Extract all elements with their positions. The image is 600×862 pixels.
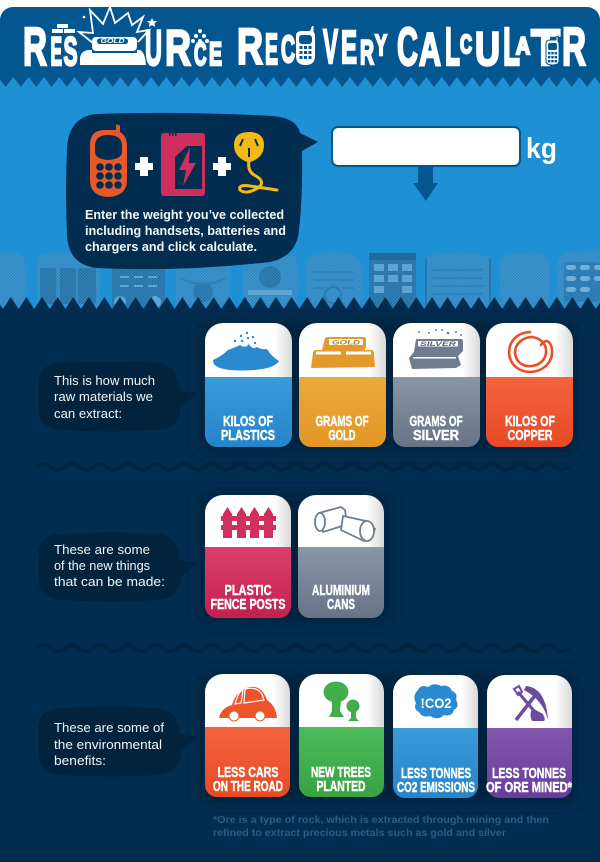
icon: co2 cloud: !CO2: [420, 695, 452, 711]
card: kilos of plastics: PLASTICS: [221, 428, 275, 444]
card: grams of silver: SILVER: [413, 428, 459, 444]
card: kilos of plastics: [205, 323, 292, 447]
icon: crushed can: [315, 507, 375, 541]
icon: mobile phone: [90, 125, 127, 197]
footnote: *Ore is a type of rock, which is extracted through mining and then: [213, 814, 549, 826]
callout: environmental benefits: benefits:: [54, 754, 106, 768]
icon: trees: [324, 682, 360, 721]
title: C: [460, 29, 472, 59]
icon: copper coil: [509, 332, 552, 372]
callout: environmental benefits: [38, 706, 197, 776]
title: E: [341, 21, 357, 73]
callout: raw materials: [38, 362, 197, 432]
icon: battery: [161, 133, 205, 196]
title: R: [165, 20, 191, 76]
callout: raw materials: raw materials we: [54, 390, 153, 404]
weight input box: [332, 127, 520, 166]
title: A: [516, 33, 530, 60]
page background: light blue: [0, 0, 600, 320]
icon: gold bar burst: [79, 7, 157, 65]
title: L: [503, 17, 520, 77]
header band: [0, 7, 600, 87]
icon: plus two: [213, 157, 231, 176]
card: less tonnes co2 emissions: [393, 675, 478, 798]
arrow: down: [413, 166, 438, 201]
instruction text: Enter the weight you’ve collected: [85, 208, 284, 222]
card: less tonnes co2 emissions: LESS TONNES: [401, 766, 471, 782]
title: V: [323, 21, 338, 74]
icon: silver bars: SILVER: [420, 342, 457, 348]
callout: new things: that can be made:: [54, 575, 165, 589]
card: grams of gold: [299, 323, 386, 447]
dark lower background with zigzag edge: [0, 297, 600, 862]
title: T: [531, 19, 560, 76]
background phones band: [0, 252, 600, 310]
title: E: [209, 36, 222, 72]
card shadow glows: [200, 322, 578, 802]
card: kilos of plastics: KILOS OF: [223, 414, 273, 430]
callout: raw materials: This is how much: [54, 374, 155, 388]
icon: stacked bars above E: [52, 24, 75, 33]
card: grams of gold: GOLD: [328, 428, 356, 444]
title: L: [445, 17, 460, 77]
card: aluminium cans: [298, 495, 384, 618]
icon: dots above C: [191, 29, 209, 43]
instruction text: chargers and click calculate.: [85, 240, 257, 254]
panel: instruction speech bubble: [66, 113, 318, 269]
card: grams of silver: [393, 323, 480, 447]
card: less cars on the road: [205, 674, 290, 797]
divider wave one: [37, 464, 569, 470]
card: kilos of copper: KILOS OF: [505, 414, 555, 430]
title: R: [237, 18, 263, 75]
card: less tonnes co2 emissions: CO2 EMISSIONS: [397, 780, 475, 796]
card: plastic fence posts: PLASTIC: [224, 583, 272, 599]
callout: environmental benefits: These are some of: [54, 721, 165, 735]
card: new trees planted: PLANTED: [316, 779, 366, 795]
card: kilos of copper: COPPER: [508, 428, 553, 444]
icon: fence: [221, 507, 276, 538]
card: plastic fence posts: [205, 495, 291, 618]
title: U: [475, 22, 500, 75]
callout: raw materials: can extract:: [54, 407, 122, 421]
card: new trees planted: NEW TREES: [311, 765, 371, 781]
card: kilos of copper: [486, 323, 573, 447]
divider wave two: [37, 645, 569, 651]
title: [23, 7, 586, 77]
title: A: [419, 23, 441, 75]
callout: new things: of the new things: [54, 559, 150, 573]
icon: title phone 1: [296, 26, 315, 65]
icon: gold bar burst: GOLD: [100, 39, 125, 45]
title: C: [194, 36, 206, 72]
title: R: [360, 34, 374, 72]
card: aluminium cans: CANS: [327, 597, 355, 613]
card: less cars on the road: LESS CARS: [218, 765, 279, 781]
title: R: [562, 17, 586, 77]
icon: pick and shovel: [514, 686, 548, 721]
icon: title phone 2: [546, 36, 559, 65]
title: U: [145, 20, 162, 76]
footnote: refined to extract precious metals such as gold and silver: [213, 827, 506, 839]
title: C: [281, 29, 295, 71]
icon: charger plug: [234, 132, 277, 192]
icon: gold bars: GOLD: [332, 340, 361, 346]
callout: environmental benefits: the environmental: [54, 738, 162, 752]
card: new trees planted: [299, 674, 384, 797]
callout: new things: These are some: [54, 543, 150, 557]
card: grams of gold: GRAMS OF: [316, 414, 369, 430]
card: aluminium cans: ALUMINIUM: [312, 583, 370, 599]
title: E: [265, 25, 278, 74]
instruction text: including handsets, batteries and: [85, 224, 286, 238]
kg label: kg: [526, 133, 557, 165]
icon: plus one: [135, 157, 153, 176]
white top edge: [0, 0, 600, 7]
card: less tonnes of ore mined: [486, 675, 572, 798]
card: less tonnes of ore mined: OF ORE MINED*: [486, 780, 572, 796]
card: plastic fence posts: FENCE POSTS: [210, 597, 286, 613]
instruction text: [85, 208, 286, 254]
icon: car: [219, 687, 277, 721]
footnote: [213, 814, 549, 839]
callout: new things: [38, 532, 197, 602]
title: R: [23, 17, 47, 77]
card: less cars on the road: ON THE ROAD: [213, 779, 283, 795]
title: S: [64, 30, 78, 74]
title: C: [397, 17, 418, 77]
card: less tonnes of ore mined: LESS TONNES: [492, 766, 566, 782]
icon: plastic pile: [213, 332, 279, 370]
card: grams of silver: GRAMS OF: [410, 414, 463, 430]
title: E: [50, 30, 62, 74]
title: Y: [375, 30, 387, 62]
